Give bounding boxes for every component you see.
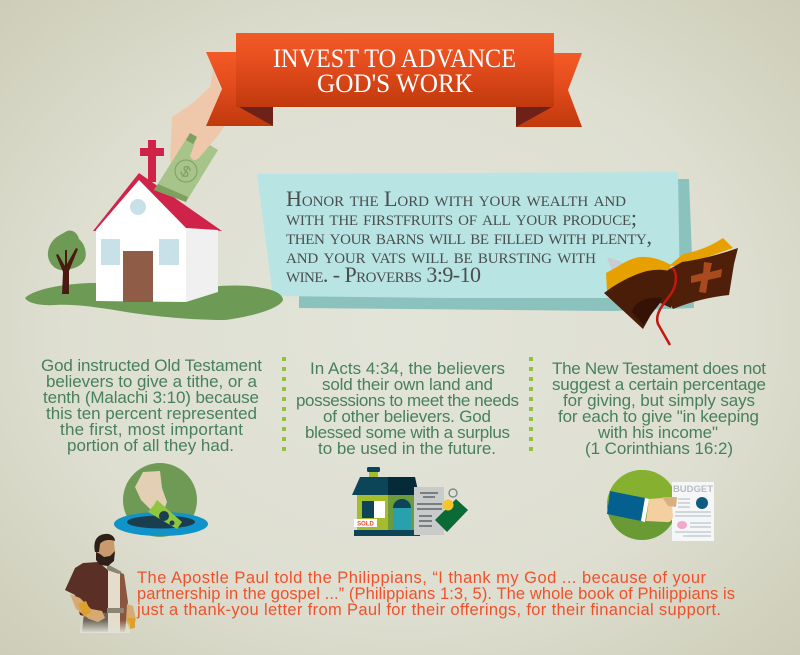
closing callout text xyxy=(136,569,735,619)
text column 2 xyxy=(296,359,519,458)
text column 2: of other believers. God xyxy=(323,407,491,426)
title text xyxy=(273,43,516,98)
title text: GOD'S WORK xyxy=(317,68,473,98)
icon: house sold with document and money: SOLD xyxy=(357,522,374,528)
text column 2: blessed some with a surplus xyxy=(305,423,510,442)
text column 1 xyxy=(41,356,262,455)
illustration: church on green hill xyxy=(25,133,283,320)
divider dots left xyxy=(282,357,286,452)
text column 2: sold their own land and xyxy=(322,375,493,394)
text column 1: this ten percent represented xyxy=(46,404,257,423)
tree xyxy=(48,231,86,294)
icon: hand dropping money in offering plate xyxy=(114,463,208,537)
icon: house sold with document and money xyxy=(352,467,468,536)
title banner xyxy=(206,33,582,127)
walls xyxy=(186,228,218,302)
text column 2: possessions to meet the needs xyxy=(296,391,519,410)
banknote: $ xyxy=(177,163,194,182)
quote text: wine. - Proverbs 3:9-10 xyxy=(286,262,481,287)
text column 3: for each to give "in keeping xyxy=(558,407,759,426)
quote text: and your vats will be bursting with xyxy=(286,243,596,268)
text column 3: for giving, but simply says xyxy=(563,391,755,410)
text column 3 xyxy=(552,359,766,458)
cross xyxy=(140,140,164,182)
icon: hand holding budget sheet: BUDGET xyxy=(673,484,713,495)
text column 3: suggest a certain percentage xyxy=(552,375,766,394)
panel: scripture quote xyxy=(257,172,694,311)
divider dots right xyxy=(529,357,533,452)
text column 3: with his income" xyxy=(597,423,718,442)
closing callout text: partnership in the gospel ...” (Philippians 1:3, 5). The whole book of Philippians is xyxy=(137,585,735,603)
text column 1: the first, most important xyxy=(60,420,243,439)
text column 1: portion of all they had. xyxy=(67,436,234,455)
icon: hand holding banknote xyxy=(170,70,224,165)
quote text: with the firstfruits of all your produce; xyxy=(286,205,637,230)
roof xyxy=(93,173,222,231)
title text: INVEST TO ADVANCE xyxy=(273,43,516,73)
quote text: Honor the Lord with your wealth and xyxy=(286,186,626,211)
text column 1: believers to give a tithe, or a xyxy=(46,372,258,391)
banknote xyxy=(154,133,218,202)
text column 3: The New Testament does not xyxy=(552,359,766,378)
quote text xyxy=(286,186,652,287)
icon: hand holding budget sheet xyxy=(607,470,714,541)
text column 2: In Acts 4:34, the believers xyxy=(310,359,505,378)
text column 1: God instructed Old Testament xyxy=(41,356,262,375)
icon: open bible xyxy=(604,238,738,345)
illustration: Apostle Paul xyxy=(65,534,136,633)
closing callout text: just a thank-you letter from Paul for their offerings, for their financial support. xyxy=(136,601,721,619)
text column 1: tenth (Malachi 3:10) because xyxy=(43,388,259,407)
text column 3: (1 Corinthians 16:2) xyxy=(585,439,733,458)
quote text: then your barns will be filled with plenty, xyxy=(286,224,652,249)
ground xyxy=(25,283,283,320)
closing callout text: The Apostle Paul told the Philippians, “I thank my God ... because of your xyxy=(137,569,706,587)
text column 2: to be used in the future. xyxy=(318,439,496,458)
